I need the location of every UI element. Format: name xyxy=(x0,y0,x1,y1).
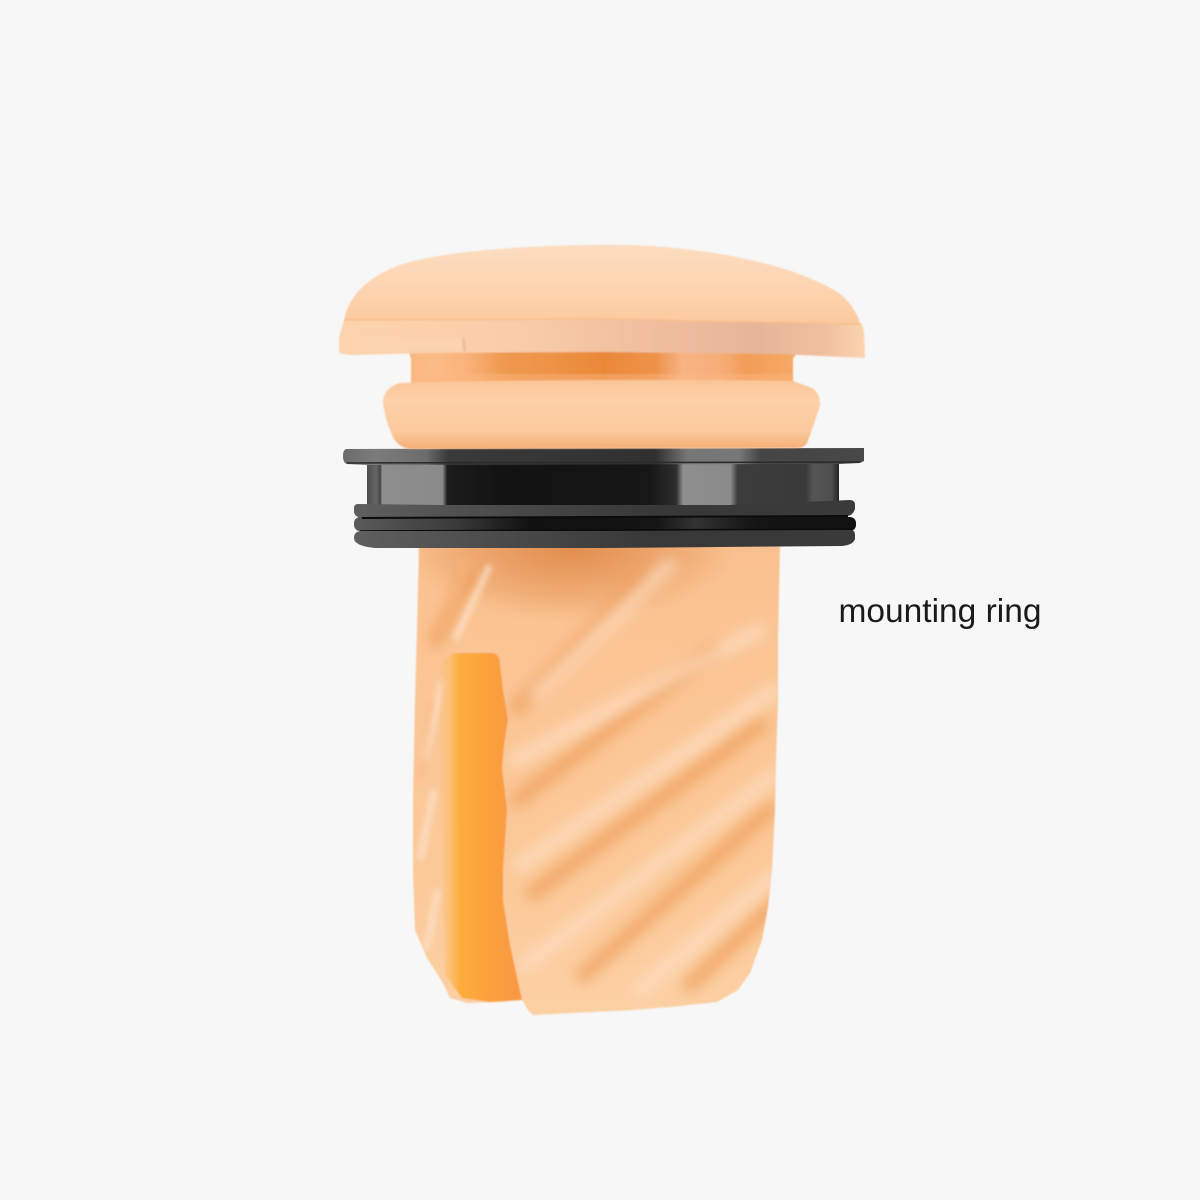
label: mounting ring: mounting ring xyxy=(838,593,1041,630)
rim xyxy=(339,318,865,358)
rim tab xyxy=(364,338,466,351)
left edge highlights xyxy=(420,565,490,950)
ring top flange xyxy=(343,448,864,465)
o-ring xyxy=(354,517,856,531)
dark spiral ribs xyxy=(436,575,780,985)
slot opening xyxy=(438,653,522,1002)
cap xyxy=(339,245,865,449)
ring lower collar xyxy=(354,530,855,548)
ring body xyxy=(367,462,839,506)
product diagram with label xyxy=(338,244,1040,1016)
light spiral ribs xyxy=(515,565,775,990)
ring upper collar xyxy=(354,500,855,518)
mounting ring xyxy=(343,448,864,548)
neck xyxy=(408,350,800,384)
lower bulge xyxy=(383,380,820,449)
dome xyxy=(344,245,860,324)
silicone sleeve xyxy=(412,546,781,1016)
